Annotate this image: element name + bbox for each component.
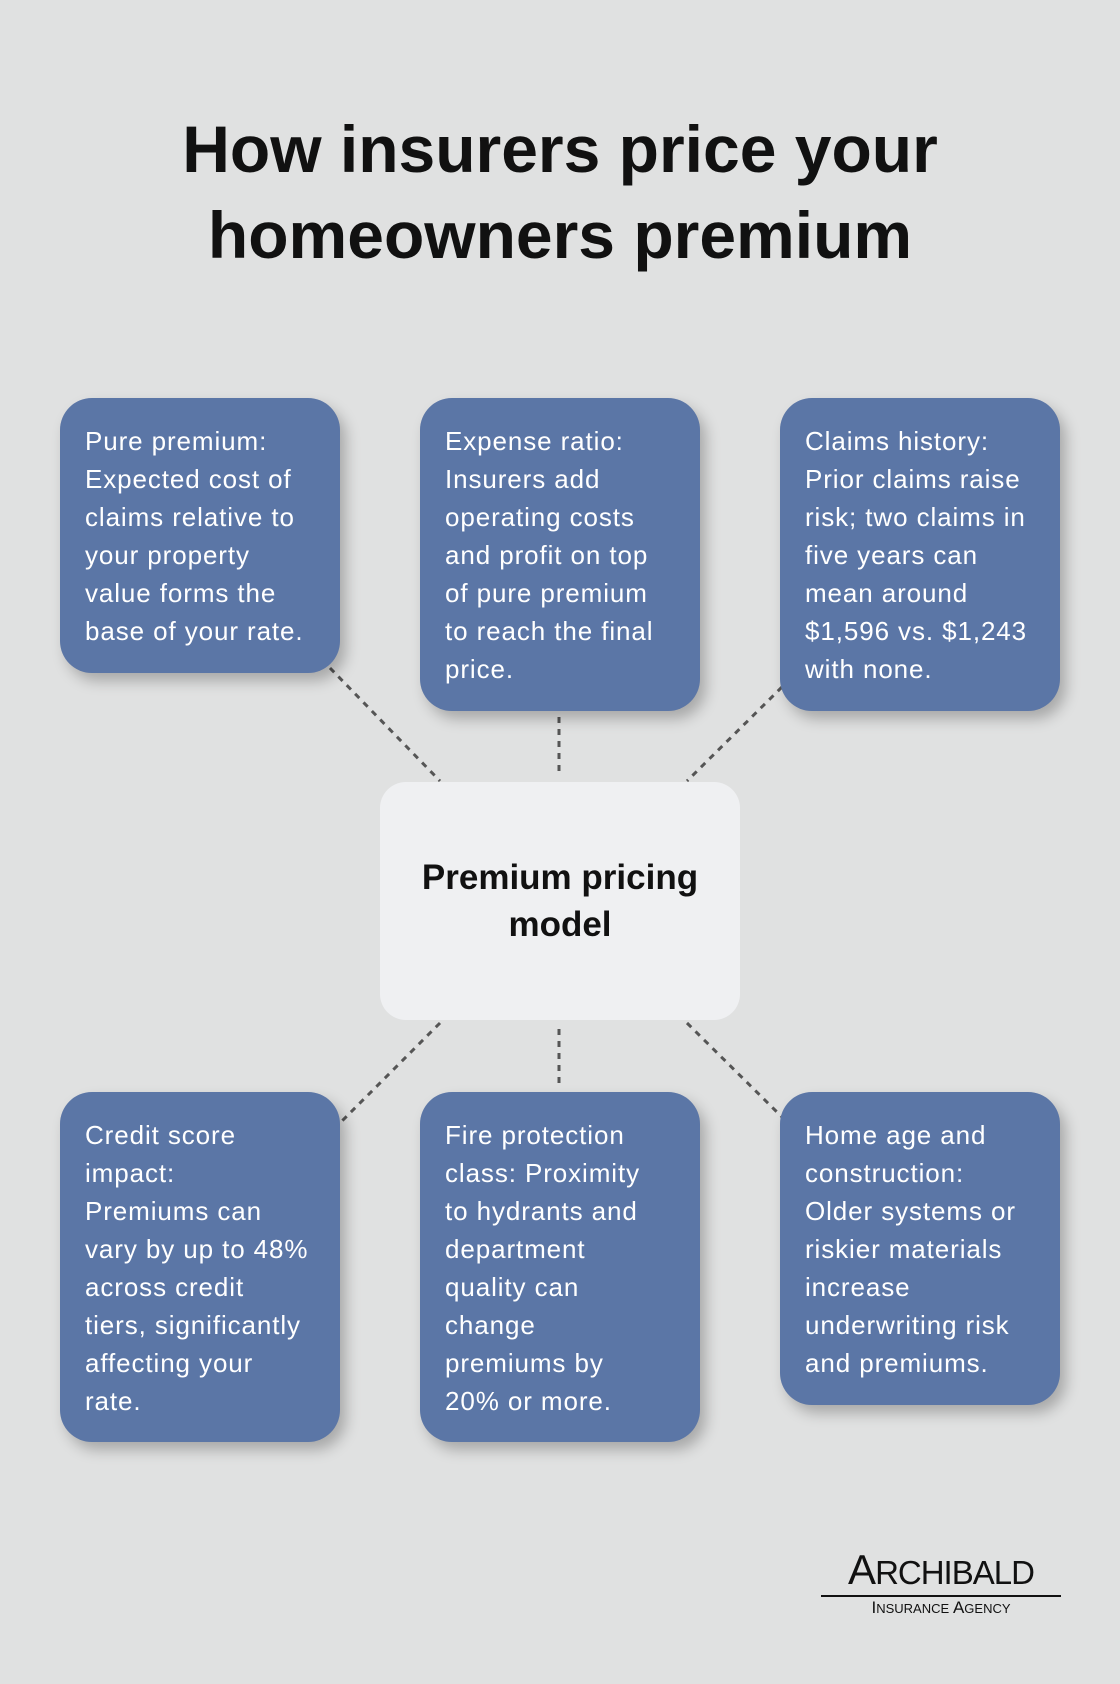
panel: fire protection xyxy=(420,1092,700,1442)
logo xyxy=(821,1546,1061,1617)
panel: credit score: tiers, significantly xyxy=(85,1310,301,1340)
panel: home age: riskier materials xyxy=(805,1234,1002,1264)
panel: fire protection: quality can xyxy=(445,1272,579,1302)
panel: expense ratio: Insurers add xyxy=(445,464,600,494)
panel: home age xyxy=(780,1092,1060,1405)
panel: credit score: Premiums can xyxy=(85,1196,262,1226)
panel: pure premium: Expected cost of xyxy=(85,464,292,494)
panel: claims history xyxy=(780,398,1060,711)
panel: expense ratio: operating costs xyxy=(445,502,635,532)
panel: pure premium: Pure premium: xyxy=(85,426,267,456)
panel: pure premium: base of your rate. xyxy=(85,616,304,646)
panel: credit score: vary by up to 48% xyxy=(85,1234,308,1264)
panel: expense ratio: of pure premium xyxy=(445,578,648,608)
panel: expense ratio: price. xyxy=(445,654,514,684)
center node: model xyxy=(508,905,612,944)
panel: fire protection: department xyxy=(445,1234,586,1264)
panel: claims history: risk; two claims in xyxy=(805,502,1026,532)
panel: home age: Home age and xyxy=(805,1120,986,1150)
panel: claims history: $1,596 vs. $1,243 xyxy=(805,616,1027,646)
panel: fire protection: Fire protection xyxy=(445,1120,625,1150)
panel: pure premium xyxy=(60,398,340,673)
panel: claims history: with none. xyxy=(805,654,933,684)
panel: fire protection: class: Proximity xyxy=(445,1158,640,1188)
title: homeowners premium xyxy=(208,198,912,272)
panel: expense ratio: Expense ratio: xyxy=(445,426,624,456)
panel: home age: Older systems or xyxy=(805,1196,1016,1226)
panel: home age: underwriting risk xyxy=(805,1310,1010,1340)
title: How insurers price your xyxy=(182,112,938,186)
title xyxy=(182,112,938,272)
panel: fire protection: change xyxy=(445,1310,536,1340)
center node xyxy=(380,782,740,1020)
panel: pure premium: claims relative to xyxy=(85,502,295,532)
logo: ARCHIBALD xyxy=(848,1546,1034,1593)
panel: expense ratio: to reach the final xyxy=(445,616,653,646)
logo: INSURANCE AGENCY xyxy=(871,1598,1011,1617)
panel: fire protection: premiums by xyxy=(445,1348,604,1378)
panel: home age: increase xyxy=(805,1272,910,1302)
panel: credit score xyxy=(60,1092,340,1442)
panel: credit score: affecting your xyxy=(85,1348,253,1378)
panel: credit score: rate. xyxy=(85,1386,142,1416)
panel: home age: and premiums. xyxy=(805,1348,989,1378)
panel: credit score: Credit score xyxy=(85,1120,236,1150)
panel: fire protection: 20% or more. xyxy=(445,1386,612,1416)
panel: expense ratio: and profit on top xyxy=(445,540,648,570)
panel: credit score: across credit xyxy=(85,1272,244,1302)
panel: pure premium: your property xyxy=(85,540,250,570)
panel: credit score: impact: xyxy=(85,1158,175,1188)
center node: Premium pricing xyxy=(422,858,698,897)
panel: home age: construction: xyxy=(805,1158,964,1188)
panel: claims history: five years can xyxy=(805,540,978,570)
panel: fire protection: to hydrants and xyxy=(445,1196,638,1226)
panel: pure premium: value forms the xyxy=(85,578,276,608)
panel: claims history: mean around xyxy=(805,578,968,608)
panel: expense ratio xyxy=(420,398,700,711)
panel: claims history: Prior claims raise xyxy=(805,464,1021,494)
panel: claims history: Claims history: xyxy=(805,426,989,456)
